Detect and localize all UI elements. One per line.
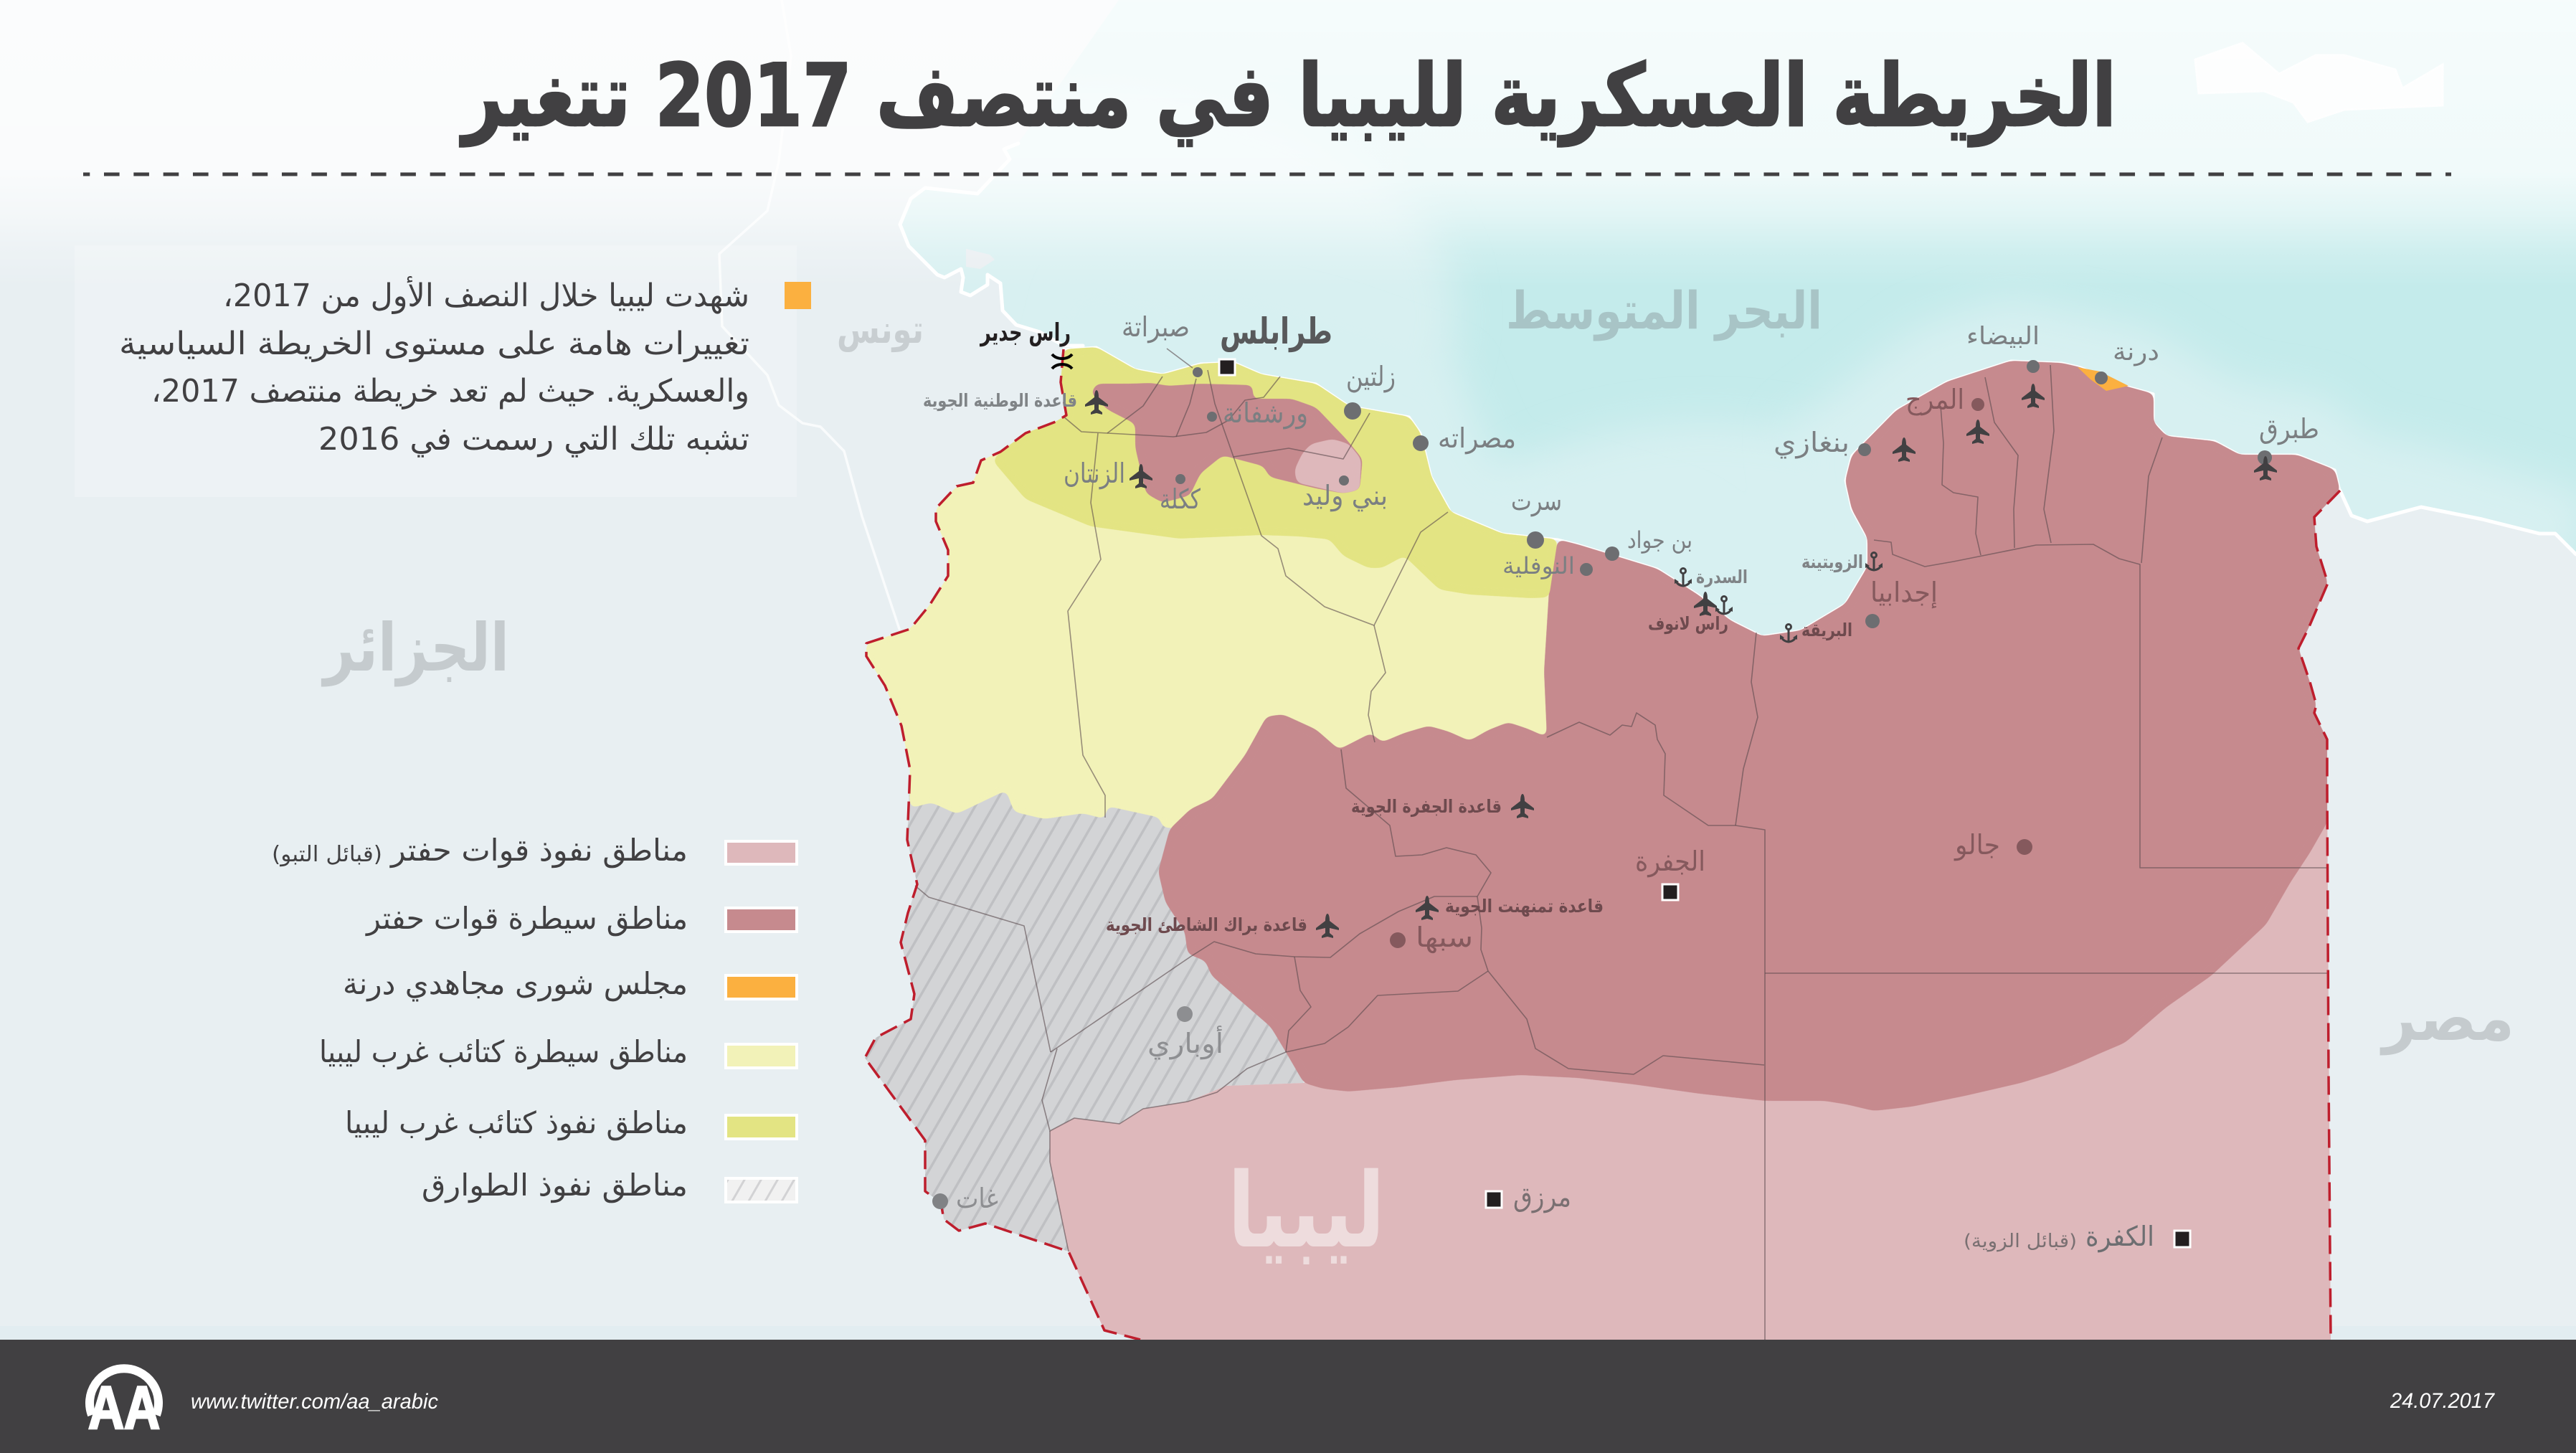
legend item: western brigades influence: مناطق نفوذ كتائب غرب ليبيا xyxy=(345,1105,688,1140)
city labels: درنة xyxy=(2113,338,2159,366)
region: Haftar influence (south) xyxy=(1050,789,2331,1340)
city labels: زلتين xyxy=(1346,361,1396,393)
city labels: بن جواد xyxy=(1627,526,1692,554)
legend item: Tuareg influence xyxy=(422,1168,797,1203)
city labels: الكفرة xyxy=(2085,1221,2154,1253)
city labels: البريقة xyxy=(1801,620,1852,641)
dashed divider xyxy=(83,172,2451,176)
internal district lines xyxy=(915,349,2327,1340)
legend item: Haftar influence xyxy=(272,833,797,868)
city labels: ورشفانة xyxy=(1223,397,1308,430)
text block: intro: شهدت ليبيا خلال النصف الأول من 2017، xyxy=(223,275,749,314)
city labels: البيضاء xyxy=(1966,322,2040,351)
city labels: بني وليد xyxy=(1302,480,1388,512)
city labels: راس جدير xyxy=(980,318,1071,347)
legend item: Tuareg influence: مناطق نفوذ الطوارق xyxy=(422,1168,688,1203)
city labels: النوفلية xyxy=(1502,552,1575,579)
city labels: المرج xyxy=(1905,384,1964,416)
legend item: Derna Shura council: مجلس شورى مجاهدي درنة xyxy=(343,966,688,1001)
capital squares xyxy=(1219,359,2190,1247)
label: Libya: ليبيا xyxy=(1228,1150,1385,1271)
city labels: بنغازي xyxy=(1774,427,1850,458)
legend item: Haftar control: مناطق سيطرة قوات حفتر xyxy=(365,901,688,936)
icon: border crossing xyxy=(1052,354,1072,369)
footer bar xyxy=(0,1340,2576,1453)
top white fade xyxy=(0,0,2576,287)
city labels: قاعدة الوطنية الجوية xyxy=(923,390,1077,412)
label: Algeria: الجزائر xyxy=(321,610,509,687)
region: Tuareg influence (hatched) xyxy=(865,789,1304,1251)
region: Haftar influence at Bani Walid xyxy=(1294,439,1361,493)
city labels: سبها xyxy=(1416,922,1473,954)
label: Mediterranean Sea: البحر المتوسط xyxy=(1506,280,1822,341)
text block: intro: والعسكرية. حيث لم تعد خريطة منتصف 2017، xyxy=(151,373,749,410)
legend item: Haftar influence: (قبائل التبو) xyxy=(272,842,382,867)
city labels: مصراته xyxy=(1438,422,1516,455)
city labels: صبراتة xyxy=(1122,311,1190,344)
region: Haftar control around Tripoli xyxy=(1091,383,1363,503)
title: الخريطة العسكرية لليبيا في منتصف 2017 تتغير xyxy=(460,47,2116,146)
region: Derna Shura council xyxy=(2078,367,2128,391)
icons: airbases xyxy=(1085,384,2277,938)
city labels: قاعدة الجفرة الجوية xyxy=(1351,796,1502,818)
legend item: Haftar influence: مناطق نفوذ قوات حفتر xyxy=(389,833,688,868)
legend xyxy=(272,833,797,1203)
city labels: غات xyxy=(956,1183,998,1214)
city labels: (قبائل الزوية) xyxy=(1964,1231,2077,1252)
city labels: قاعدة براك الشاطئ الجوية xyxy=(1106,914,1307,936)
red dashed national border xyxy=(865,349,2340,1340)
city labels: ككلة xyxy=(1160,483,1201,515)
city labels: سرت xyxy=(1511,485,1562,517)
city labels: مرزق xyxy=(1513,1181,1571,1213)
sea: Mediterranean xyxy=(902,124,2576,635)
white coast lines and neighbouring borders xyxy=(719,0,2576,636)
city labels: طبرق xyxy=(2259,413,2319,445)
island: Crete xyxy=(2195,43,2443,122)
region: western brigades control xyxy=(866,347,1558,839)
footer: twitter link: www.twitter.com/aa_arabic xyxy=(191,1390,438,1414)
footer: date: 24.07.2017 xyxy=(2390,1389,2495,1413)
text block: intro: تغييرات هامة على مستوى الخريطة السياسية xyxy=(119,326,749,362)
region: Haftar control xyxy=(1158,361,2340,1111)
label: Egypt: مصر xyxy=(2380,981,2514,1055)
panel: intro text xyxy=(75,245,811,497)
map: Libya territories xyxy=(865,347,2340,1340)
legend item: western brigades control: مناطق سيطرة كتائب غرب ليبيا xyxy=(319,1034,688,1069)
city dots xyxy=(932,360,2272,1209)
city labels: إجدابيا xyxy=(1870,577,1938,609)
city labels: جالو xyxy=(1954,829,2000,861)
icon: orange bullet xyxy=(785,282,811,309)
city labels: قاعدة تمنهنت الجوية xyxy=(1445,896,1604,917)
icon: Anadolu Agency logo: AA xyxy=(88,1374,160,1442)
island: Djerba xyxy=(966,249,995,269)
city labels xyxy=(923,311,2319,1253)
country and sea names xyxy=(321,280,2514,1271)
city labels: الجفرة xyxy=(1635,846,1705,878)
city labels: راس لانوف xyxy=(1648,613,1728,635)
text block: intro xyxy=(119,275,749,458)
label: Tunisia: تونس xyxy=(837,307,924,352)
city labels: أوباري xyxy=(1147,1026,1223,1060)
city labels: طرابلس xyxy=(1220,311,1332,353)
city labels: السدرة xyxy=(1696,567,1748,587)
city labels: الزنتان xyxy=(1064,458,1125,490)
text block: intro: تشبه تلك التي رسمت في 2016 xyxy=(318,421,749,458)
region: western brigades influence xyxy=(993,347,1558,598)
icons: ports xyxy=(1675,552,1883,642)
city labels: الزويتينة xyxy=(1801,552,1863,573)
